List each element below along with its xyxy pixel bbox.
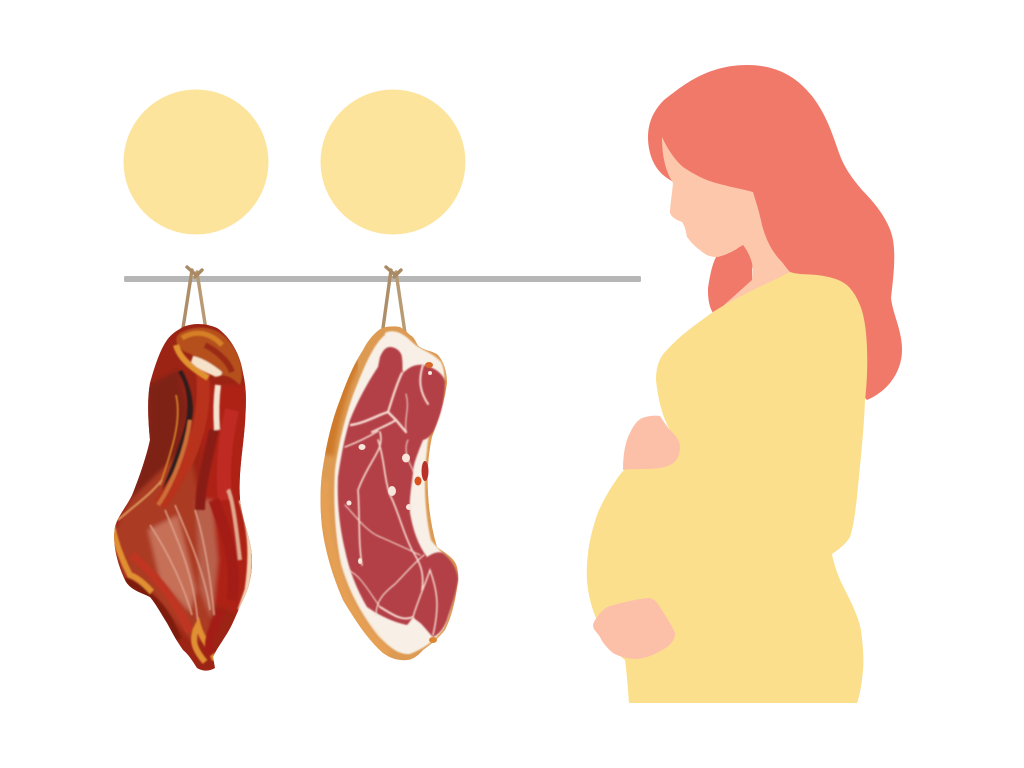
face and neck: [662, 137, 790, 314]
fat spots: [346, 371, 432, 564]
yellow circle right: [320, 90, 466, 234]
pregnant woman figure: [587, 65, 902, 703]
cured meat right: [320, 326, 459, 660]
upper hand on belly: [623, 416, 680, 470]
marbling veins: [345, 365, 437, 635]
long hair: [648, 65, 902, 400]
rope left: [183, 267, 206, 330]
lower hand under belly: [593, 598, 675, 659]
hair under chin: [708, 245, 752, 313]
lean red muscle: [338, 347, 458, 637]
dark spots on the fat: [414, 362, 437, 643]
cured meat left: [114, 324, 252, 671]
rope right: [383, 267, 405, 333]
illustration canvas: [114, 65, 902, 703]
yellow circle left: [124, 90, 268, 234]
grey hanging bar: [124, 276, 641, 282]
inner dark fold: [162, 370, 193, 490]
fat layer: [334, 331, 456, 654]
knot at top: [176, 328, 242, 385]
yellow dress: [587, 272, 867, 703]
